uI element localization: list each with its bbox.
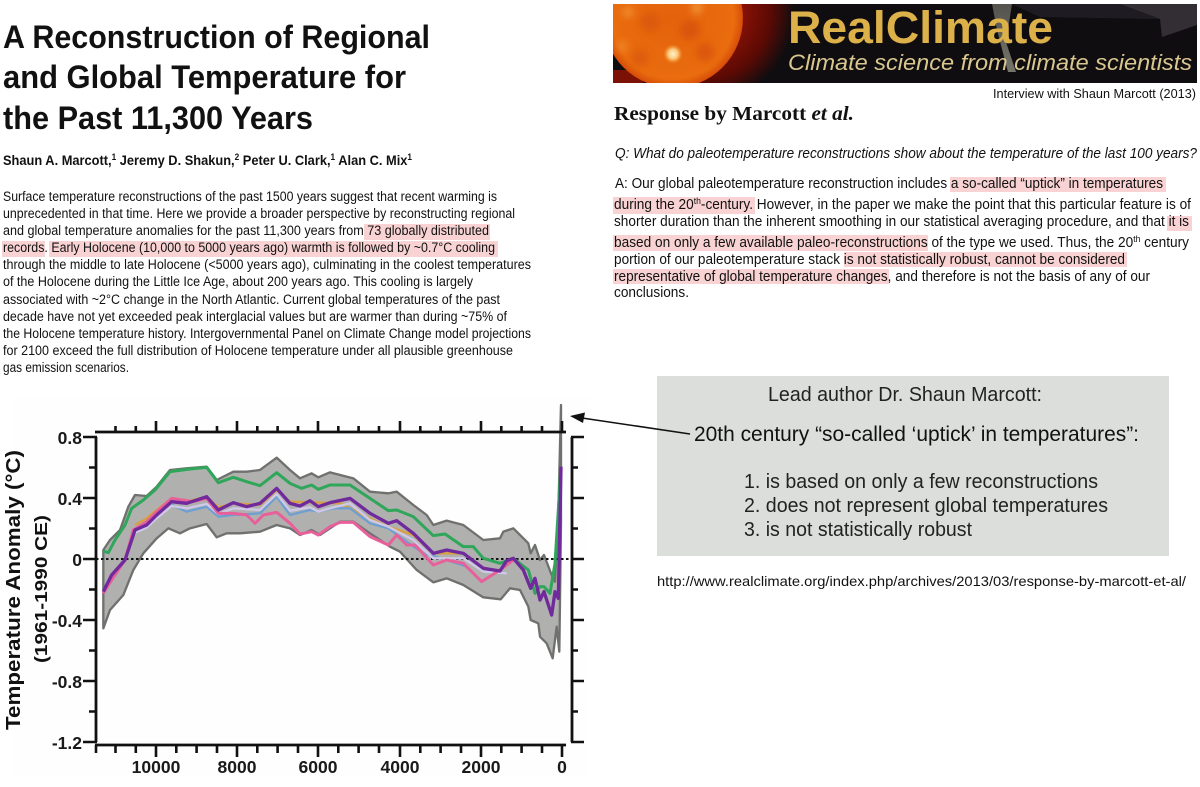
interview answer: th xyxy=(1133,234,1140,244)
RealClimate banner xyxy=(613,4,1197,83)
article authors: 1 xyxy=(112,152,116,162)
y axis title: (1961-1990 CE) xyxy=(31,515,51,663)
article authors: 1 xyxy=(331,152,335,162)
y axis title: Temperature Anomaly (°C) xyxy=(3,450,25,730)
interview answer: shorter duration than the inherent smoothing in our statistical averaging procedure, and that it is xyxy=(614,214,1189,230)
banner caption: Interview with Shaun Marcott (2013) xyxy=(993,86,1196,101)
RealClimate banner: RealClimate xyxy=(788,2,1053,53)
curve: lavender xyxy=(135,494,507,573)
article abstract: the Holocene temperature history. Intergovernmental Panel on Climate Change model projections xyxy=(3,326,531,341)
article authors: Shaun A. Marcott, xyxy=(3,152,122,168)
callout list xyxy=(744,471,1108,541)
article title xyxy=(3,19,430,136)
article abstract: and global temperature anomalies for the past 11,300 years from 73 globally distributed xyxy=(3,223,489,238)
x axis labels: 8000 xyxy=(218,757,257,777)
y axis labels xyxy=(52,428,82,753)
source URL: http://www.realclimate.org/index.php/archives/2013/03/response-by-marcott-et-al/ xyxy=(657,573,1186,589)
callout list: 2. does not represent global temperatures xyxy=(744,495,1108,517)
interview answer: based on only a few available paleo-reconstructions of the type we used. Thus, the 20 xyxy=(614,235,1157,251)
article abstract: Surface temperature reconstructions of the past 1500 years suggest that recent warming is xyxy=(3,189,497,204)
x axis labels: 6000 xyxy=(299,757,338,777)
RealClimate banner: Climate science from climate scientists xyxy=(788,50,1192,75)
article abstract: unprecedented in that time. Here we provide a broader perspective by reconstructing regional xyxy=(3,206,515,221)
axes xyxy=(83,421,584,757)
article abstract: decade have not yet exceeded peak interglacial values but are warmer than during ~75% of xyxy=(3,309,507,324)
interview answer: portion of our paleotemperature stack is not statistically robust, cannot be considered xyxy=(614,252,1125,268)
article abstract: gas emission scenarios. xyxy=(3,360,129,375)
zero reference line xyxy=(96,558,572,560)
x axis labels xyxy=(132,757,567,777)
x axis labels: 0 xyxy=(557,757,567,777)
x axis labels: 4000 xyxy=(381,757,420,777)
y axis labels: 0.4 xyxy=(58,489,82,509)
article authors: Alan C. Mix xyxy=(335,152,408,168)
callout list: 3. is not statistically robust xyxy=(744,519,972,541)
callout heading: Lead author Dr. Shaun Marcott: xyxy=(768,384,1042,406)
article authors: Jeremy D. Shakun, xyxy=(116,152,235,168)
article authors: 1 xyxy=(407,152,412,162)
interview answer: th xyxy=(694,196,701,206)
curve: blue xyxy=(172,497,467,567)
callout list: 1. is based on only a few reconstructions xyxy=(744,471,1098,493)
interview answer: conclusions. xyxy=(614,285,689,301)
curve: green xyxy=(103,467,561,593)
article abstract: associated with ~2°C change in the North Atlantic. Current global temperatures of the past xyxy=(3,292,500,307)
article abstract: for 2100 exceed the full distribution of Holocene temperature under all plausible greenhouse xyxy=(3,343,513,358)
callout subject: 20th century “so-called ‘uptick’ in temperatures”: xyxy=(694,423,1139,446)
y axis title xyxy=(3,450,51,730)
curve: pink xyxy=(103,498,513,593)
callout box xyxy=(657,376,1169,556)
response heading: Response by Marcott et al. xyxy=(614,103,854,125)
interview answer: A: Our global paleotemperature reconstruction includes a so-called “uptick” in temperatures xyxy=(615,176,1163,192)
article authors: 2 xyxy=(235,152,239,162)
x axis labels: 2000 xyxy=(462,757,501,777)
interview answer: century xyxy=(1140,235,1190,251)
article abstract xyxy=(2,189,531,375)
reconstruction curves xyxy=(103,467,561,615)
temperature chart xyxy=(3,396,589,777)
interview answer: representative of global temperature changes, and therefore is not the basis of any of our xyxy=(614,269,1150,285)
y axis labels: -0.4 xyxy=(52,611,82,631)
interview answer xyxy=(613,176,1192,301)
arrow to uptick xyxy=(570,412,690,434)
interview answer: during the 20 xyxy=(614,197,697,213)
y axis labels: 0 xyxy=(72,550,82,570)
interview answer: -century. However, in the paper we make the point that this particular feature is of xyxy=(701,197,1191,213)
article abstract: records. Early Holocene (10,000 to 5000 years ago) warmth is followed by ~0.7°C cooling xyxy=(3,240,495,255)
y axis labels: -0.8 xyxy=(52,672,82,692)
uncertainty band xyxy=(103,405,561,658)
article abstract: of the Holocene during the Little Ice Age, about 200 years ago. This cooling is largely xyxy=(3,274,473,289)
article title: and Global Temperature for xyxy=(3,59,406,95)
curve: purple mean xyxy=(103,467,561,615)
article title: the Past 11,300 Years xyxy=(3,100,313,136)
article abstract: through the middle to late Holocene (<5000 years ago), culminating in the coolest temperatures xyxy=(3,257,531,272)
x axis labels: 10000 xyxy=(132,757,181,777)
article authors: Peter U. Clark, xyxy=(239,152,331,168)
article title: A Reconstruction of Regional xyxy=(3,19,430,55)
curve: orange xyxy=(135,490,463,553)
y axis labels: 0.8 xyxy=(58,428,82,448)
y axis labels: -1.2 xyxy=(52,733,82,753)
